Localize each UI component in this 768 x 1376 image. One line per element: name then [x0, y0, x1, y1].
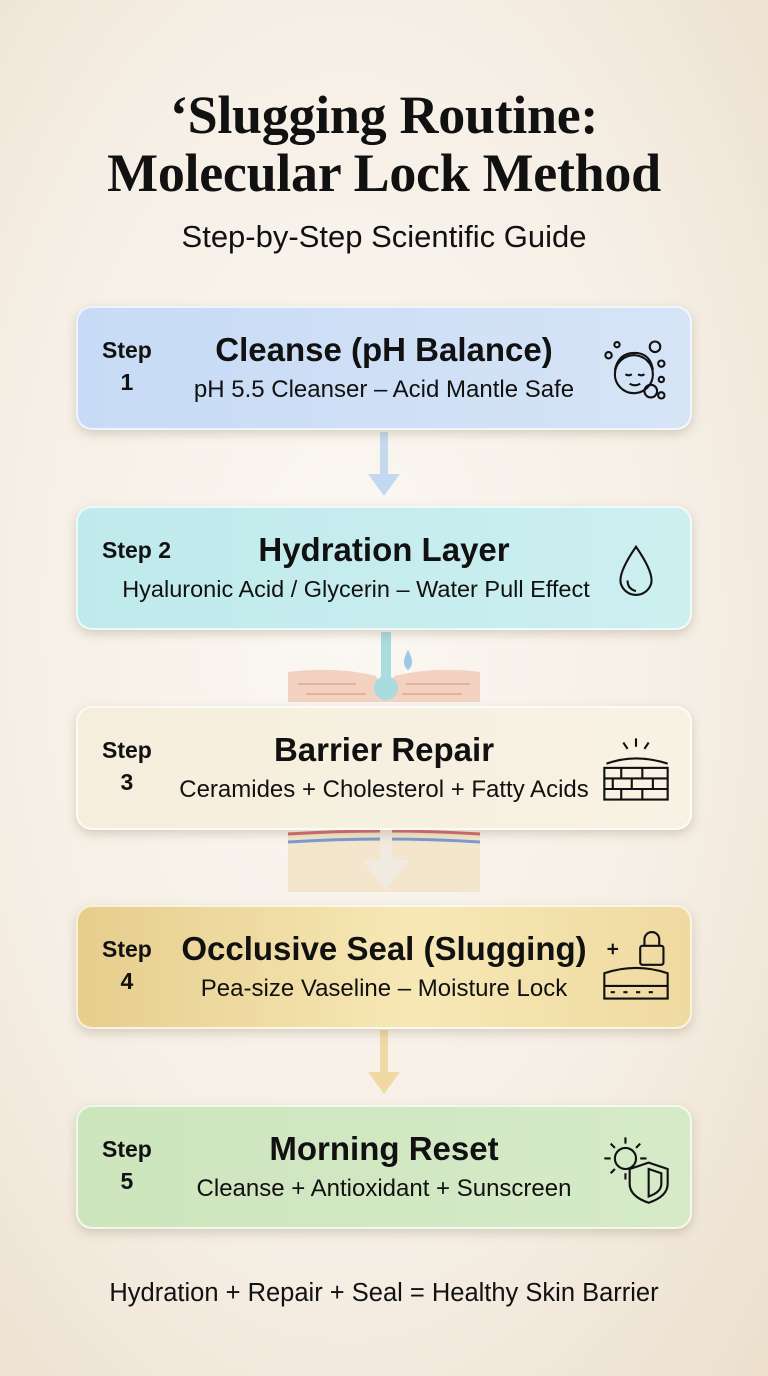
card: step 1: Cleanse (pH Balance)	[215, 331, 553, 368]
card: step 1: Step	[102, 337, 152, 363]
card: step 5: Cleanse + Antioxidant + Sunscreen	[197, 1175, 571, 1202]
card: step 5	[76, 1105, 692, 1229]
card: step 1: 1	[121, 369, 133, 395]
card: step 5: Step	[102, 1136, 152, 1162]
card: step 4: Pea-size Vaseline – Moisture Lock	[201, 975, 567, 1002]
icon: face with bubbles	[604, 340, 666, 400]
card: step 5: 5	[121, 1168, 133, 1194]
title: Molecular Lock Method	[107, 143, 661, 203]
card: step 2: Hydration Layer	[258, 531, 510, 568]
card: step 3	[76, 706, 692, 830]
card: step 4	[76, 905, 692, 1029]
card: step 4: Occlusive Seal (Slugging)	[181, 930, 587, 967]
card: step 2: Hyaluronic Acid / Glycerin – Water Pull Effect	[122, 576, 590, 602]
card: step 3: Step	[102, 737, 152, 763]
icon: brick barrier	[603, 738, 669, 801]
card: step 1	[76, 306, 692, 430]
title: ‘Slugging Routine:	[170, 85, 598, 145]
card: step 3: 3	[121, 769, 133, 795]
card: step 4: 4	[121, 968, 133, 994]
card: step 2	[76, 506, 692, 630]
card: step 2: Step 2	[102, 537, 171, 563]
skin illustration	[288, 632, 480, 892]
card: step 1: pH 5.5 Cleanser – Acid Mantle Safe	[194, 376, 574, 403]
card: step 5: Morning Reset	[269, 1130, 499, 1167]
footer tagline: Hydration + Repair + Seal = Healthy Skin Barrier	[109, 1279, 659, 1307]
subtitle: Step-by-Step Scientific Guide	[182, 219, 586, 254]
card: step 3: Barrier Repair	[274, 731, 494, 768]
title	[107, 85, 661, 203]
card: step 4: Step	[102, 936, 152, 962]
icon: sun and shield	[604, 1137, 669, 1204]
icon: lock over layer	[603, 931, 669, 1000]
arrow 1-2	[368, 432, 400, 496]
icon: water drop	[619, 545, 653, 596]
arrow 4-5	[368, 1030, 400, 1094]
card: step 3: Ceramides + Cholesterol + Fatty Acids	[179, 776, 589, 803]
